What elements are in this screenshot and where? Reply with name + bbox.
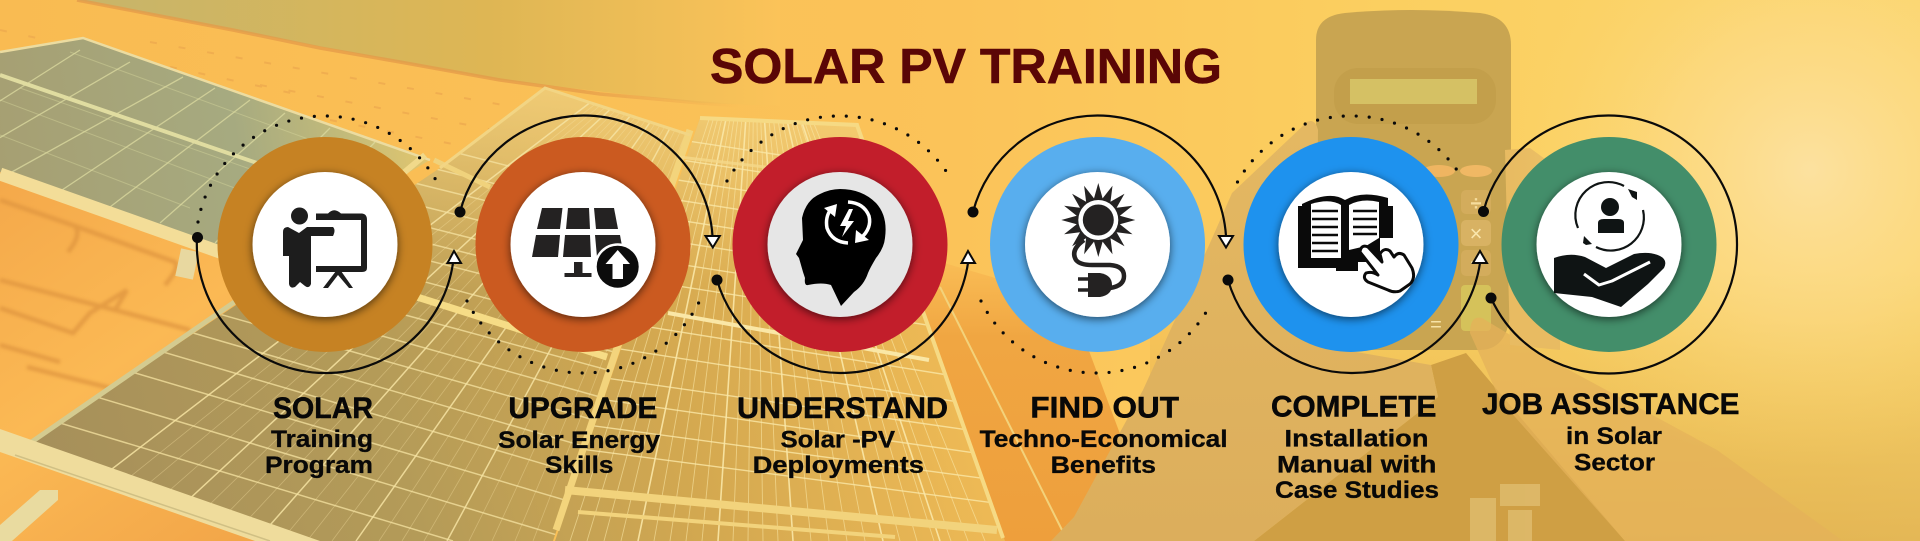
label 1: Program	[265, 452, 373, 479]
ring 5	[1244, 137, 1458, 352]
label 5: COMPLETE	[1271, 390, 1436, 424]
icon: head with energy cycle	[796, 189, 886, 306]
calculator	[1316, 10, 1511, 350]
ring 1	[218, 137, 432, 352]
dotted arc 1	[198, 116, 437, 222]
label 5: Manual with	[1277, 452, 1436, 478]
ring 3	[732, 137, 948, 352]
dotted arc 5	[1238, 116, 1459, 182]
label 3: Deployments	[753, 452, 924, 479]
dotted arc 4	[981, 301, 1208, 373]
green upper panel	[0, 38, 430, 268]
label 6: Sector	[1574, 450, 1655, 477]
icon: open book with pointing hand	[1298, 194, 1414, 292]
label 3: UNDERSTAND	[737, 392, 948, 425]
step 2: upgrade solar energy skills	[454, 115, 720, 479]
label 5: Case Studies	[1275, 477, 1439, 504]
label 2: Skills	[545, 452, 614, 479]
calculator: ÷	[1471, 193, 1482, 215]
label 2: UPGRADE	[508, 392, 657, 425]
ring 2	[476, 137, 690, 352]
label 1	[265, 392, 373, 479]
label 4	[980, 392, 1228, 479]
solid arc 1 with arrow	[192, 232, 461, 373]
step 4: find out techno-economical benefits	[968, 116, 1233, 479]
step 1: solar training program	[192, 116, 461, 479]
title: SOLAR PV TRAINING	[710, 40, 1222, 94]
solid arc 3 with arrow	[712, 251, 975, 373]
icon: presenter at board	[283, 208, 367, 288]
calculator: −	[1470, 252, 1482, 274]
label 5: Installation	[1284, 426, 1428, 452]
solid arc 2 with arrow	[454, 115, 720, 248]
solid arc 6	[1478, 115, 1737, 374]
icon: solar panel with upload badge	[532, 208, 641, 290]
label 4: Techno-Economical	[980, 426, 1228, 453]
label 4: FIND OUT	[1030, 392, 1179, 424]
label 2: Solar Energy	[498, 427, 661, 454]
panel frame rails	[0, 88, 860, 541]
icon: hand holding person in cycle	[1554, 182, 1665, 307]
step 3: understand solar pv deployments	[712, 116, 975, 479]
step 5: complete installation manual with case studies	[1222, 116, 1487, 504]
icon: sun with plug	[1061, 183, 1135, 297]
label 3: Solar -PV	[780, 427, 895, 454]
calculator: ×	[1470, 221, 1482, 246]
label 6: JOB ASSISTANCE	[1482, 388, 1740, 421]
step 6: job assistance in solar sector	[1478, 115, 1740, 477]
calculator: =	[1430, 314, 1442, 336]
label 6	[1482, 388, 1740, 477]
left solar array	[36, 90, 684, 541]
label 4: Benefits	[1051, 452, 1156, 479]
right solar array	[555, 116, 1062, 541]
label 2	[498, 392, 661, 479]
solid arc 4 with arrow	[968, 116, 1233, 248]
label 1: SOLAR	[273, 392, 373, 425]
ring 4	[990, 137, 1205, 352]
label 5	[1271, 390, 1439, 504]
ring 6	[1502, 137, 1716, 352]
hands holding calculator	[1051, 121, 1843, 541]
solid arc 5 with arrow	[1222, 251, 1487, 373]
label 3	[737, 392, 948, 479]
label 6: in Solar	[1566, 423, 1662, 450]
dotted arc 3	[727, 116, 948, 181]
dotted arc 2	[467, 298, 701, 373]
label 1: Training	[271, 426, 373, 453]
